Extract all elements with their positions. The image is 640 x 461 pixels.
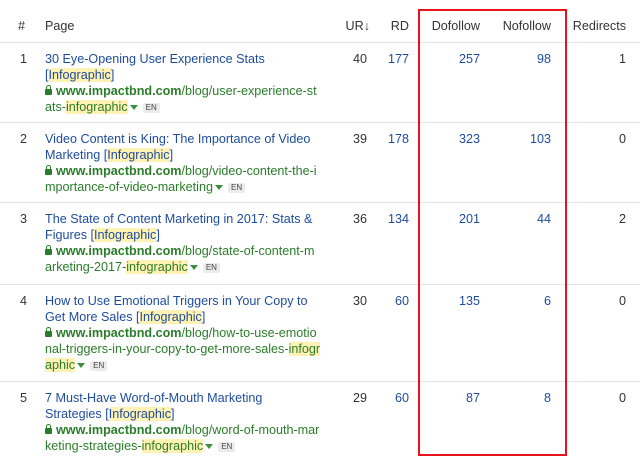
text: EN	[93, 361, 104, 370]
text: RD	[391, 19, 409, 33]
text: nal-triggers-in-your-copy-to-get-more-sales-infogr	[45, 342, 320, 356]
text: Get More Sales [Infographic]	[45, 310, 205, 324]
text: EN	[206, 263, 217, 272]
text: Marketing [Infographic]	[45, 148, 173, 162]
text: 177	[388, 52, 409, 66]
text: 44	[537, 212, 551, 226]
text: 98	[537, 52, 551, 66]
text: 40	[353, 52, 367, 66]
text: 60	[395, 391, 409, 405]
text: 1	[20, 52, 27, 66]
text: EN	[221, 442, 232, 451]
text: 0	[619, 294, 626, 308]
text: 39	[353, 132, 367, 146]
text: 134	[388, 212, 409, 226]
text: 29	[353, 391, 367, 405]
text: EN	[146, 103, 157, 112]
text: 257	[459, 52, 480, 66]
text: How to Use Emotional Triggers in Your Copy to	[45, 294, 308, 308]
text: 103	[530, 132, 551, 146]
row 4	[20, 294, 626, 372]
text: Video Content is King: The Importance of Video	[45, 132, 310, 146]
text: 7 Must-Have Word-of-Mouth Marketing	[45, 391, 262, 405]
text: 3	[20, 212, 27, 226]
text: aphic	[45, 358, 75, 372]
text: 2	[619, 212, 626, 226]
text: 178	[388, 132, 409, 146]
text: www.impactbnd.com/blog/state-of-content-m	[56, 244, 314, 258]
text: 6	[544, 294, 551, 308]
text: www.impactbnd.com/blog/how-to-use-emotio	[56, 326, 317, 340]
text: arketing-2017-infographic	[45, 260, 188, 274]
text: 30	[353, 294, 367, 308]
highlight box: dofollow/nofollow	[418, 9, 567, 456]
text: Figures [Infographic]	[45, 228, 160, 242]
text: mportance-of-video-marketing	[45, 180, 213, 194]
text: 0	[619, 391, 626, 405]
text: Page	[45, 19, 74, 33]
text: EN	[231, 183, 242, 192]
text: keting-strategies-infographic	[45, 439, 203, 453]
row 3	[20, 212, 626, 274]
text: 5	[20, 391, 27, 405]
text: 4	[20, 294, 27, 308]
text: [Infographic]	[45, 68, 114, 82]
text: 0	[619, 132, 626, 146]
text: 135	[459, 294, 480, 308]
text: www.impactbnd.com/blog/word-of-mouth-mar	[56, 423, 319, 437]
table header	[18, 19, 626, 33]
text: Dofollow	[432, 19, 480, 33]
text: 30 Eye-Opening User Experience Stats	[45, 52, 265, 66]
text: UR↓	[346, 19, 370, 33]
text: Nofollow	[503, 19, 551, 33]
text: 36	[353, 212, 367, 226]
text: Redirects	[573, 19, 626, 33]
row 1	[20, 52, 626, 114]
text: www.impactbnd.com/blog/user-experience-st	[56, 84, 317, 98]
text: 8	[544, 391, 551, 405]
text: Strategies [Infographic]	[45, 407, 175, 421]
text: 201	[459, 212, 480, 226]
text: 323	[459, 132, 480, 146]
text: 60	[395, 294, 409, 308]
text: 2	[20, 132, 27, 146]
text: #	[18, 19, 25, 33]
text: www.impactbnd.com/blog/video-content-the-i	[56, 164, 317, 178]
text: 1	[619, 52, 626, 66]
row 5	[20, 391, 626, 453]
row 2	[20, 132, 626, 194]
text: 87	[466, 391, 480, 405]
text: The State of Content Marketing in 2017: Stats &	[45, 212, 312, 226]
text: ats-infographic	[45, 100, 128, 114]
